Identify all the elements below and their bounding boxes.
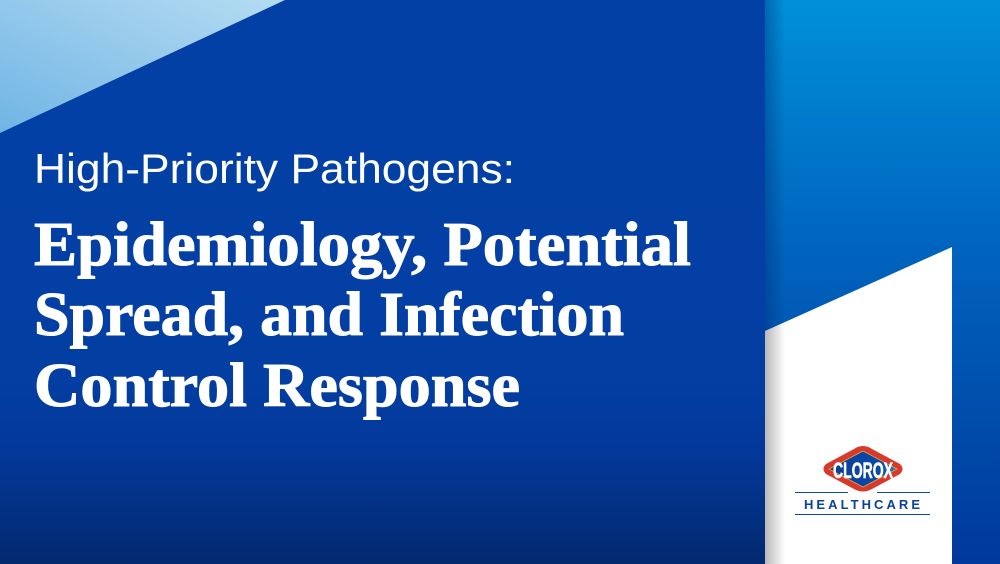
logo rules bbox=[795, 492, 930, 515]
icon: Clorox diamond badge: CLOROX bbox=[833, 458, 893, 483]
main heading: Epidemiology, Potential bbox=[34, 211, 691, 279]
panel: right blue column bbox=[765, 0, 1000, 564]
subtitle: High-Priority Pathogens: bbox=[34, 145, 515, 192]
panel: main blue background bbox=[0, 0, 765, 564]
panel: white logo area bbox=[765, 247, 952, 564]
logo wordmark: HEALTHCARE bbox=[804, 497, 920, 512]
main heading bbox=[34, 211, 691, 420]
main heading: Control Response bbox=[34, 352, 520, 420]
logo: Clorox Healthcare bbox=[795, 446, 930, 515]
main heading: Spread, and Infection bbox=[34, 281, 624, 349]
corner accent triangle bbox=[0, 0, 285, 133]
